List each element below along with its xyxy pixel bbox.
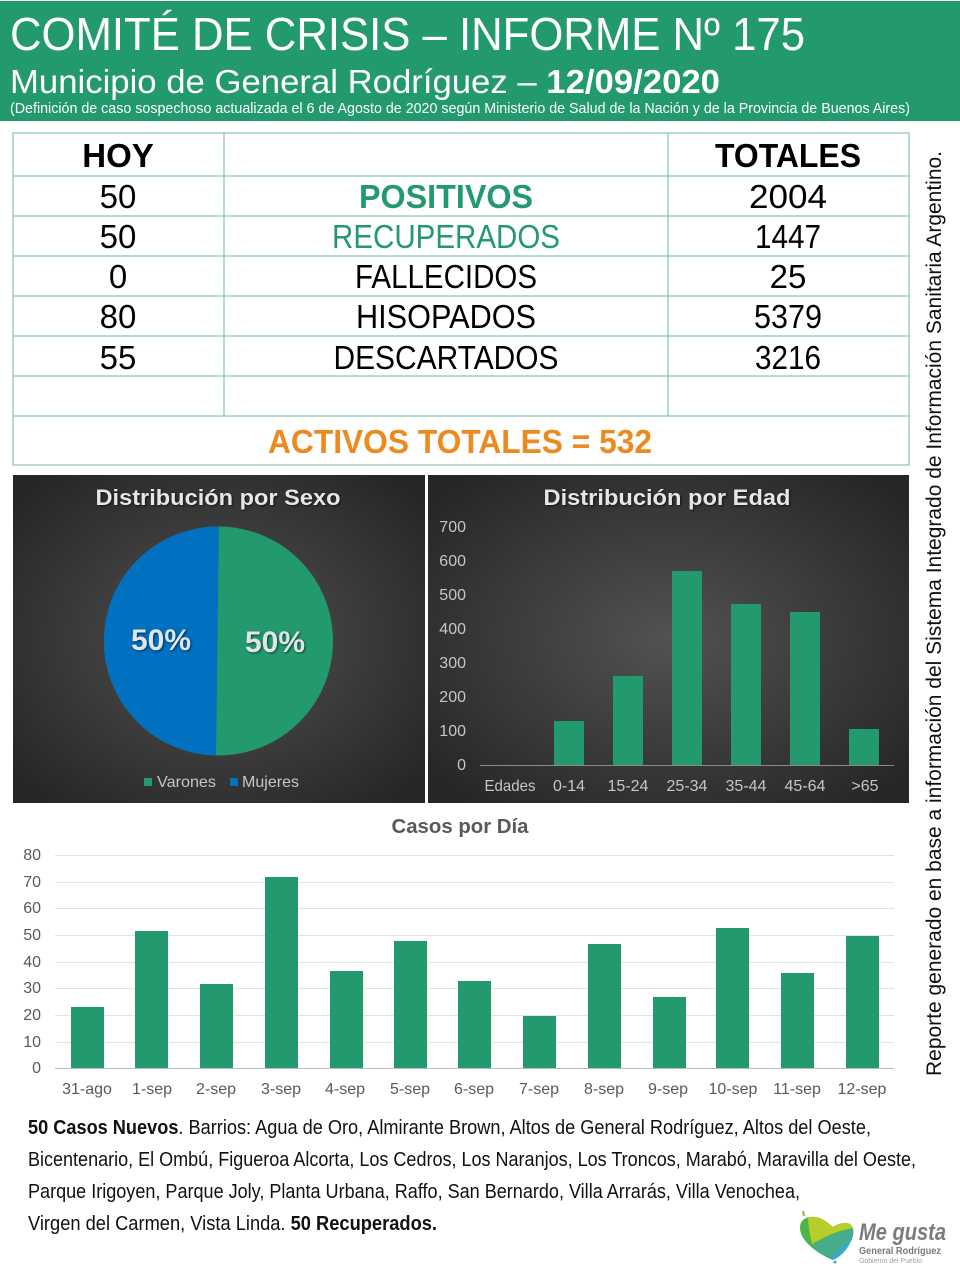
x labels: 31-ago (62, 1081, 112, 1098)
chart: cases per day (23, 816, 894, 1098)
row: recuperados: RECUPERADOS (332, 218, 560, 255)
x labels: 9-sep (648, 1081, 688, 1098)
x labels: 11-sep (773, 1081, 821, 1098)
logo: Me gusta General Rodríguez (798, 1211, 946, 1265)
row: positivos: 50 (100, 178, 136, 215)
x labels: 35-44 (726, 778, 767, 795)
y axis: 40 (23, 954, 41, 971)
row: positivos: POSITIVOS (359, 178, 533, 215)
x labels: 2-sep (196, 1081, 236, 1098)
row: hisopados (100, 298, 822, 335)
column headings (82, 137, 861, 174)
legend: Mujeres (242, 774, 299, 791)
new cases text block (28, 1117, 916, 1235)
x labels (62, 1081, 887, 1098)
x labels: 7-sep (519, 1081, 559, 1098)
y axis: 20 (23, 1007, 41, 1024)
y axis: 60 (23, 900, 41, 917)
x labels: 12-sep (838, 1081, 887, 1098)
row: descartados (100, 339, 821, 376)
y axis (439, 519, 466, 774)
y axis: 400 (439, 621, 466, 638)
row: hisopados: HISOPADOS (356, 298, 536, 335)
subtitle with date: Municipio de General Rodríguez – 12/09/2020 (10, 63, 720, 100)
x labels: 4-sep (325, 1081, 365, 1098)
row: hisopados: 80 (100, 298, 136, 335)
x labels: 1-sep (132, 1081, 172, 1098)
active total: ACTIVOS TOTALES = 532 (268, 423, 652, 460)
y axis: 300 (439, 655, 466, 672)
row: fallecidos (109, 258, 806, 295)
x labels: 10-sep (709, 1081, 758, 1098)
y axis: 30 (23, 980, 41, 997)
row: positivos (100, 178, 827, 215)
y axis: 100 (439, 723, 466, 740)
logo: Me gusta General Rodríguez: General Rodríguez (859, 1246, 941, 1257)
panel: distribution by sex (13, 475, 425, 803)
row: descartados: 3216 (755, 339, 821, 376)
row: positivos: 2004 (749, 178, 827, 215)
logo: Me gusta General Rodríguez: Gobierno del Pueblo (859, 1258, 922, 1265)
header banner (0, 1, 960, 121)
y axis (23, 847, 41, 1077)
x labels: 6-sep (454, 1081, 494, 1098)
row: hisopados: 5379 (754, 298, 822, 335)
pie chart: 50% (131, 624, 191, 657)
x labels: 8-sep (584, 1081, 624, 1098)
panel: distribution by age (428, 475, 909, 803)
y axis: 600 (439, 553, 466, 570)
pie chart: 50% (245, 626, 305, 659)
y axis: 0 (457, 757, 466, 774)
icon: heart (800, 1210, 854, 1264)
title: COMITÉ DE CRISIS – INFORME Nº 175 (10, 8, 805, 60)
y axis: 700 (439, 519, 466, 536)
x labels: 45-64 (785, 778, 826, 795)
new cases text block: 50 Casos Nuevos. Barrios: Agua de Oro, Almirante Brown, Altos de General Rodríguez, Altos del Oeste, (28, 1117, 871, 1139)
x labels: Edades (484, 778, 536, 795)
y axis: 70 (23, 874, 41, 891)
row: recuperados: 1447 (755, 218, 821, 255)
heading: Distribución por Sexo (96, 485, 340, 510)
row: fallecidos: 0 (109, 258, 127, 295)
x labels: >65 (851, 778, 879, 795)
vertical source note: Reporte generado en base a información del Sistema Integrado de Información Sanitaria Argentino. (923, 151, 946, 1076)
x labels: 3-sep (261, 1081, 301, 1098)
summary table (13, 133, 909, 465)
x labels (484, 778, 879, 795)
row: fallecidos: FALLECIDOS (355, 258, 537, 295)
row: recuperados: 50 (100, 218, 136, 255)
new cases text block: Virgen del Carmen, Vista Linda. 50 Recuperados. (28, 1213, 437, 1235)
pie chart (100, 520, 340, 760)
bars (554, 571, 879, 765)
x labels: 15-24 (608, 778, 649, 795)
x labels: 25-34 (667, 778, 708, 795)
x labels: 0-14 (553, 778, 585, 795)
legend (144, 774, 299, 791)
y axis: 500 (439, 587, 466, 604)
row: fallecidos: 25 (770, 258, 806, 295)
heading: Distribución por Edad (544, 485, 790, 510)
legend: Varones (157, 774, 216, 791)
row: recuperados (100, 218, 821, 255)
y axis: 80 (23, 847, 41, 864)
column headings: HOY (82, 137, 154, 174)
column headings: TOTALES (715, 137, 861, 174)
y axis: 0 (32, 1060, 41, 1077)
row: descartados: DESCARTADOS (334, 339, 558, 376)
x labels: 5-sep (390, 1081, 430, 1098)
case definition note: (Definición de caso sospechoso actualizada el 6 de Agosto de 2020 según Ministerio de Salud de la Nación y de la Provincia de Buenos Aires) (10, 100, 910, 117)
heading: Casos por Día (392, 816, 529, 838)
y axis: 200 (439, 689, 466, 706)
new cases text block: Parque Irigoyen, Parque Joly, Planta Urbana, Raffo, San Bernardo, Villa Arrarás, Villa Venochea, (28, 1181, 800, 1203)
logo wordmark: Me gusta (859, 1219, 946, 1246)
y axis: 50 (23, 927, 41, 944)
row: descartados: 55 (100, 339, 136, 376)
bars (71, 877, 879, 1068)
y axis: 10 (23, 1034, 41, 1051)
